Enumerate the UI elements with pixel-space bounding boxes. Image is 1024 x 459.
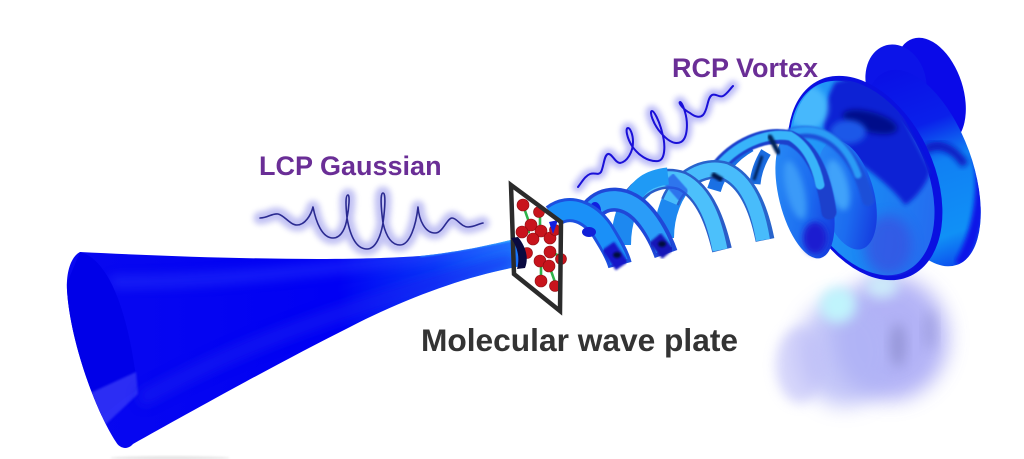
ring at wave plate [511,237,527,269]
vortex helix tube [553,130,868,266]
back lobes of vortex [857,29,979,155]
second disk [806,134,888,256]
tube arc B [628,176,722,250]
wave: RCP Vortex [578,86,733,187]
tube top turn and first band [716,135,829,212]
tube first arc [553,210,622,266]
wave: LCP Gaussian [260,193,483,249]
label: LCP Gaussian: LCP Gaussian [259,151,442,181]
second band over disks [792,130,868,200]
faint cone shadow [110,456,230,459]
tube arc C [670,170,765,240]
black frame [511,185,561,311]
label: Molecular wave plate: Molecular wave plate [421,322,738,358]
third disk [764,128,846,264]
reflection of the vortex [776,274,948,406]
main large disk [788,76,942,280]
red atoms [516,199,566,292]
tube arc A [589,200,668,254]
back legs of helix [621,145,766,245]
label: RCP Vortex: RCP Vortex [672,53,818,83]
molecular wave plate [511,185,566,311]
green bonds [521,205,560,285]
gaussian beam cone [60,239,522,448]
back disk [906,84,981,266]
